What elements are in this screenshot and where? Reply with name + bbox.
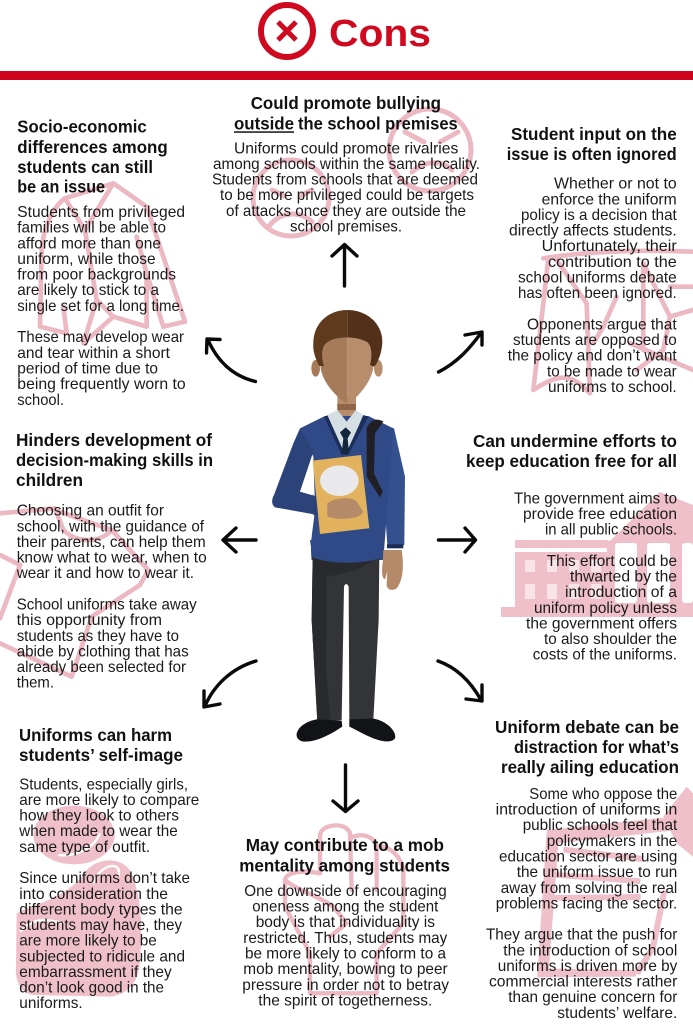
body text: into consideration the bbox=[19, 886, 168, 903]
heading: May contribute to a mob bbox=[246, 835, 444, 855]
heading: decision-making skills in bbox=[16, 450, 213, 470]
heading bbox=[507, 124, 677, 164]
body text: thwarted by the bbox=[570, 568, 677, 586]
body text bbox=[242, 883, 449, 1009]
student upper body bbox=[272, 310, 405, 560]
body text: students may have, they bbox=[19, 917, 182, 934]
body text: contribution to the bbox=[548, 254, 677, 271]
body text: enforce the uniform bbox=[542, 191, 677, 208]
heading: Could promote bullying bbox=[251, 93, 441, 113]
body text: to be more privileged could be targets bbox=[220, 187, 474, 204]
heading: Hinders development of bbox=[16, 430, 212, 450]
arrow: right bbox=[438, 528, 476, 552]
body text: their parents, can help them bbox=[17, 534, 206, 551]
body text: the spirit of togetherness. bbox=[258, 992, 432, 1009]
arrow: up-right bbox=[438, 332, 482, 372]
body text: They argue that the push for bbox=[486, 927, 677, 944]
body text: embarrassment if they bbox=[19, 964, 172, 981]
body text: has often been ignored. bbox=[518, 285, 677, 302]
watermark: figures bbox=[16, 806, 141, 997]
heading: students can still bbox=[17, 157, 153, 177]
body text: afford more than one bbox=[17, 235, 161, 252]
panel: free education bbox=[466, 431, 677, 664]
body text: the policy and don’t want bbox=[508, 348, 677, 365]
body text: period of time due to bbox=[17, 360, 158, 378]
body text: in all public schools. bbox=[545, 522, 677, 539]
body text: Whether or not to bbox=[554, 176, 677, 193]
panel: decision-making skills bbox=[16, 430, 213, 692]
heading bbox=[466, 431, 677, 471]
red divider bar bbox=[0, 71, 693, 80]
body text: are more likely to be bbox=[19, 933, 157, 950]
watermark: shirt bbox=[0, 508, 148, 677]
body text bbox=[508, 176, 677, 396]
student lower body bbox=[297, 540, 403, 742]
body text: abide by clothing that has bbox=[17, 643, 189, 660]
body text: wear it and how to wear it. bbox=[16, 565, 194, 582]
body text: School uniforms take away bbox=[17, 596, 197, 614]
watermark: frowning faces bbox=[253, 109, 471, 236]
panel: mob mentality bbox=[239, 835, 450, 1009]
heading bbox=[234, 93, 458, 133]
body text: the uniform issue to run bbox=[517, 864, 677, 881]
body text: the introduction of school bbox=[503, 942, 677, 959]
body text: of attacks once they are outside the bbox=[226, 203, 466, 220]
body text: introduction of uniforms in bbox=[496, 802, 677, 819]
body text: uniforms. bbox=[19, 995, 83, 1012]
body text: oneness among the student bbox=[252, 899, 439, 916]
body text: school premises. bbox=[290, 218, 402, 236]
arrow: left bbox=[223, 528, 256, 552]
header: cons title bbox=[261, 5, 431, 57]
heading: really ailing education bbox=[501, 757, 679, 777]
body text bbox=[212, 140, 480, 236]
central student illustration bbox=[272, 310, 405, 742]
body text: families will be able to bbox=[17, 220, 166, 237]
arrow: down bbox=[333, 765, 358, 812]
heading: mentality among students bbox=[239, 856, 450, 876]
body text bbox=[17, 204, 186, 409]
body text: them. bbox=[17, 675, 54, 692]
body text: commercial interests rather bbox=[489, 974, 677, 991]
body text: Students from privileged bbox=[17, 204, 185, 221]
body text: This effort could be bbox=[547, 553, 677, 570]
body text: school, with the guidance of bbox=[17, 518, 205, 535]
body text: Choosing an outfit for bbox=[17, 503, 164, 520]
body text: school. bbox=[17, 392, 64, 409]
body text: being frequently worn to bbox=[17, 376, 186, 393]
heading bbox=[19, 725, 183, 765]
body text: Students from schools that are deemed bbox=[212, 172, 478, 189]
body text: costs of the uniforms. bbox=[533, 647, 677, 664]
panel: self-image bbox=[18, 725, 199, 1012]
body text: away from solving the real bbox=[501, 880, 677, 897]
body text: These may develop wear bbox=[17, 329, 184, 346]
body text: and tear within a short bbox=[17, 345, 171, 362]
body text: Uniforms could promote rivalries bbox=[234, 140, 458, 157]
panel: student input ignored bbox=[507, 124, 677, 396]
panel: distraction from real problems bbox=[486, 717, 679, 1022]
heading: differences among bbox=[17, 137, 168, 157]
body text: mob mentality, bowing to peer bbox=[243, 961, 448, 978]
body text: already been selected for bbox=[17, 659, 186, 676]
body text: Opponents argue that bbox=[527, 316, 677, 333]
icon: x in circle bbox=[261, 5, 313, 57]
body text: different body types the bbox=[19, 901, 183, 918]
body text bbox=[16, 503, 207, 692]
body text: students’ welfare. bbox=[557, 1005, 677, 1022]
body text: Some who oppose the bbox=[529, 786, 677, 803]
heading bbox=[495, 717, 679, 777]
body text: uniforms is driven more by bbox=[498, 958, 677, 975]
body text: Since uniforms don’t take bbox=[19, 870, 190, 887]
body text: students as they have to bbox=[17, 628, 179, 645]
heading bbox=[17, 117, 168, 197]
watermark: school uniforms bbox=[533, 251, 693, 393]
body text: body is that individuality is bbox=[256, 914, 435, 931]
body text: the government offers bbox=[526, 615, 677, 632]
body text: uniform, while those bbox=[17, 251, 156, 268]
heading: keep education free for all bbox=[466, 451, 677, 471]
body text: how they look to others bbox=[19, 808, 179, 825]
panel: bullying outside school bbox=[212, 93, 480, 236]
body text: introduction of a bbox=[565, 584, 677, 601]
heading: Can undermine efforts to bbox=[473, 431, 677, 451]
body text: this opportunity from bbox=[17, 612, 162, 629]
title: Cons bbox=[329, 13, 431, 55]
heading: be an issue bbox=[17, 177, 105, 197]
heading: issue is often ignored bbox=[507, 144, 677, 164]
body text: policy is a decision that bbox=[521, 207, 677, 224]
heading bbox=[16, 430, 213, 490]
body text: are more likely to compare bbox=[19, 792, 199, 809]
watermark: raised fist bbox=[285, 825, 403, 993]
body text: subjected to ridicule and bbox=[19, 948, 185, 965]
body text bbox=[514, 490, 677, 664]
body text bbox=[486, 786, 678, 1022]
body text bbox=[18, 776, 199, 1012]
arrow: up bbox=[332, 244, 357, 286]
heading: Uniforms can harm bbox=[19, 725, 172, 745]
body text: restricted. Thus, students may bbox=[243, 930, 447, 947]
body text: among schools within the same locality. bbox=[213, 156, 480, 173]
body text: be more likely to conform to a bbox=[245, 946, 446, 962]
body text: than genuine concern for bbox=[508, 989, 677, 1006]
watermark: jacket bbox=[40, 183, 185, 343]
heading: students’ self-image bbox=[19, 745, 183, 765]
body text: The government aims to bbox=[514, 490, 677, 507]
body text: to also shoulder the bbox=[544, 631, 677, 648]
arrow: up-left bbox=[206, 339, 256, 382]
arrow: down-right bbox=[438, 661, 482, 701]
body text: school uniforms debate bbox=[518, 270, 677, 286]
heading: Student input on the bbox=[511, 124, 677, 144]
body text: know what to wear, when to bbox=[17, 550, 207, 567]
body text: One downside of encouraging bbox=[244, 883, 447, 900]
body text: public schools feel that bbox=[523, 817, 678, 834]
heading: Socio-economic bbox=[17, 117, 147, 137]
body text: to be made to wear bbox=[547, 363, 677, 380]
body text: uniforms to school. bbox=[548, 379, 677, 396]
body text: are likely to stick to a bbox=[17, 282, 159, 299]
body text: from poor backgrounds bbox=[17, 267, 176, 284]
body text: education sector are using bbox=[499, 848, 677, 866]
heading: the school premises bbox=[298, 113, 458, 133]
body text: don’t look good in the bbox=[19, 980, 164, 997]
body text: provide free education bbox=[523, 506, 677, 523]
body text: when made to wear the bbox=[18, 823, 178, 840]
body text: students are opposed to bbox=[513, 332, 677, 349]
heading: distraction for what’s bbox=[514, 737, 679, 757]
watermark: notebook and pencil bbox=[537, 787, 693, 977]
body text: same type of outfit. bbox=[19, 839, 150, 856]
body text: uniform policy unless bbox=[534, 600, 677, 617]
body text: problems facing the sector. bbox=[496, 895, 677, 912]
body text: policymakers in the bbox=[547, 833, 677, 850]
watermark: school building bbox=[501, 492, 693, 617]
panel: socio-economic differences bbox=[17, 117, 186, 409]
body text: pressure in order not to betray bbox=[242, 977, 449, 994]
body text: Unfortunately, their bbox=[542, 238, 677, 255]
heading: Uniform debate can be bbox=[495, 717, 679, 737]
body text: directly affects students. bbox=[509, 223, 677, 240]
body text: single set for a long time. bbox=[17, 298, 184, 315]
heading bbox=[239, 835, 450, 876]
heading: outside bbox=[234, 113, 294, 133]
body text: Students, especially girls, bbox=[19, 776, 188, 793]
arrow: down-left bbox=[204, 661, 256, 707]
heading: children bbox=[16, 470, 83, 490]
